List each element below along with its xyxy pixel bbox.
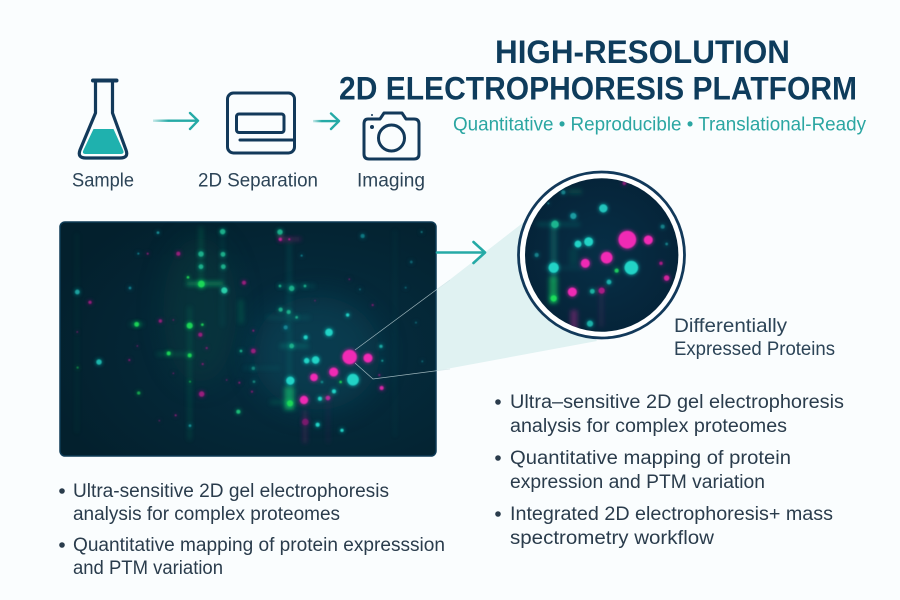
text block: right bullet list: Quantitative mapping of protein [510,448,791,469]
icon: camera [364,113,419,159]
text block: left bullet list: and PTM variation [73,558,223,579]
subtitle: Quantitative • Reproducible • Translational-Ready [453,114,866,136]
text block: left bullet list [59,481,445,579]
text block: right bullet list: analysis for complex proteomes [510,416,787,437]
panel: 2D gel image [60,222,436,456]
green and teal spots [75,229,423,432]
arrow: sample to separation [153,113,198,129]
text block: left bullet list: Quantitative mapping of protein expresssion [73,535,445,556]
text block: right bullet list [495,392,844,549]
zoom wedge connecting gel to lens [430,222,597,372]
title: HIGH-RESOLUTION [495,34,790,70]
title: 2D ELECTROPHORESIS PLATFORM [339,70,857,106]
icon: 2D separation box [228,93,294,153]
text block: right bullet list: Ultra–sensitive 2D gel electrophoresis [510,392,844,413]
title [339,34,857,106]
callout lines from highlighted spot to lens [355,280,450,379]
label: differentially expressed proteins: Differentially [674,315,787,337]
label: differentially expressed proteins: Expressed Proteins [674,338,835,360]
text block: right bullet list: Integrated 2D electrophoresis+ mass [510,504,833,525]
magnified lens view [518,172,684,338]
lens spots [535,182,669,327]
arrow: gel to lens [437,242,485,263]
text block: right bullet list: expression and PTM variation [510,472,765,493]
label: differentially expressed proteins [674,315,835,360]
label: Imaging: Imaging [357,170,425,192]
icon: flask with sample [79,80,127,158]
label: 2D Separation: 2D Separation [198,170,318,192]
text block: right bullet list: spectrometry workflow [510,528,714,549]
text block: left bullet list: Ultra-sensitive 2D gel electrophoresis [73,481,389,502]
arrow: separation to imaging [313,114,339,129]
lens streaks [537,189,604,330]
label: Sample: Sample [72,170,134,192]
gel streaks and haze [130,226,377,444]
text block: left bullet list: analysis for complex proteomes [73,504,340,525]
